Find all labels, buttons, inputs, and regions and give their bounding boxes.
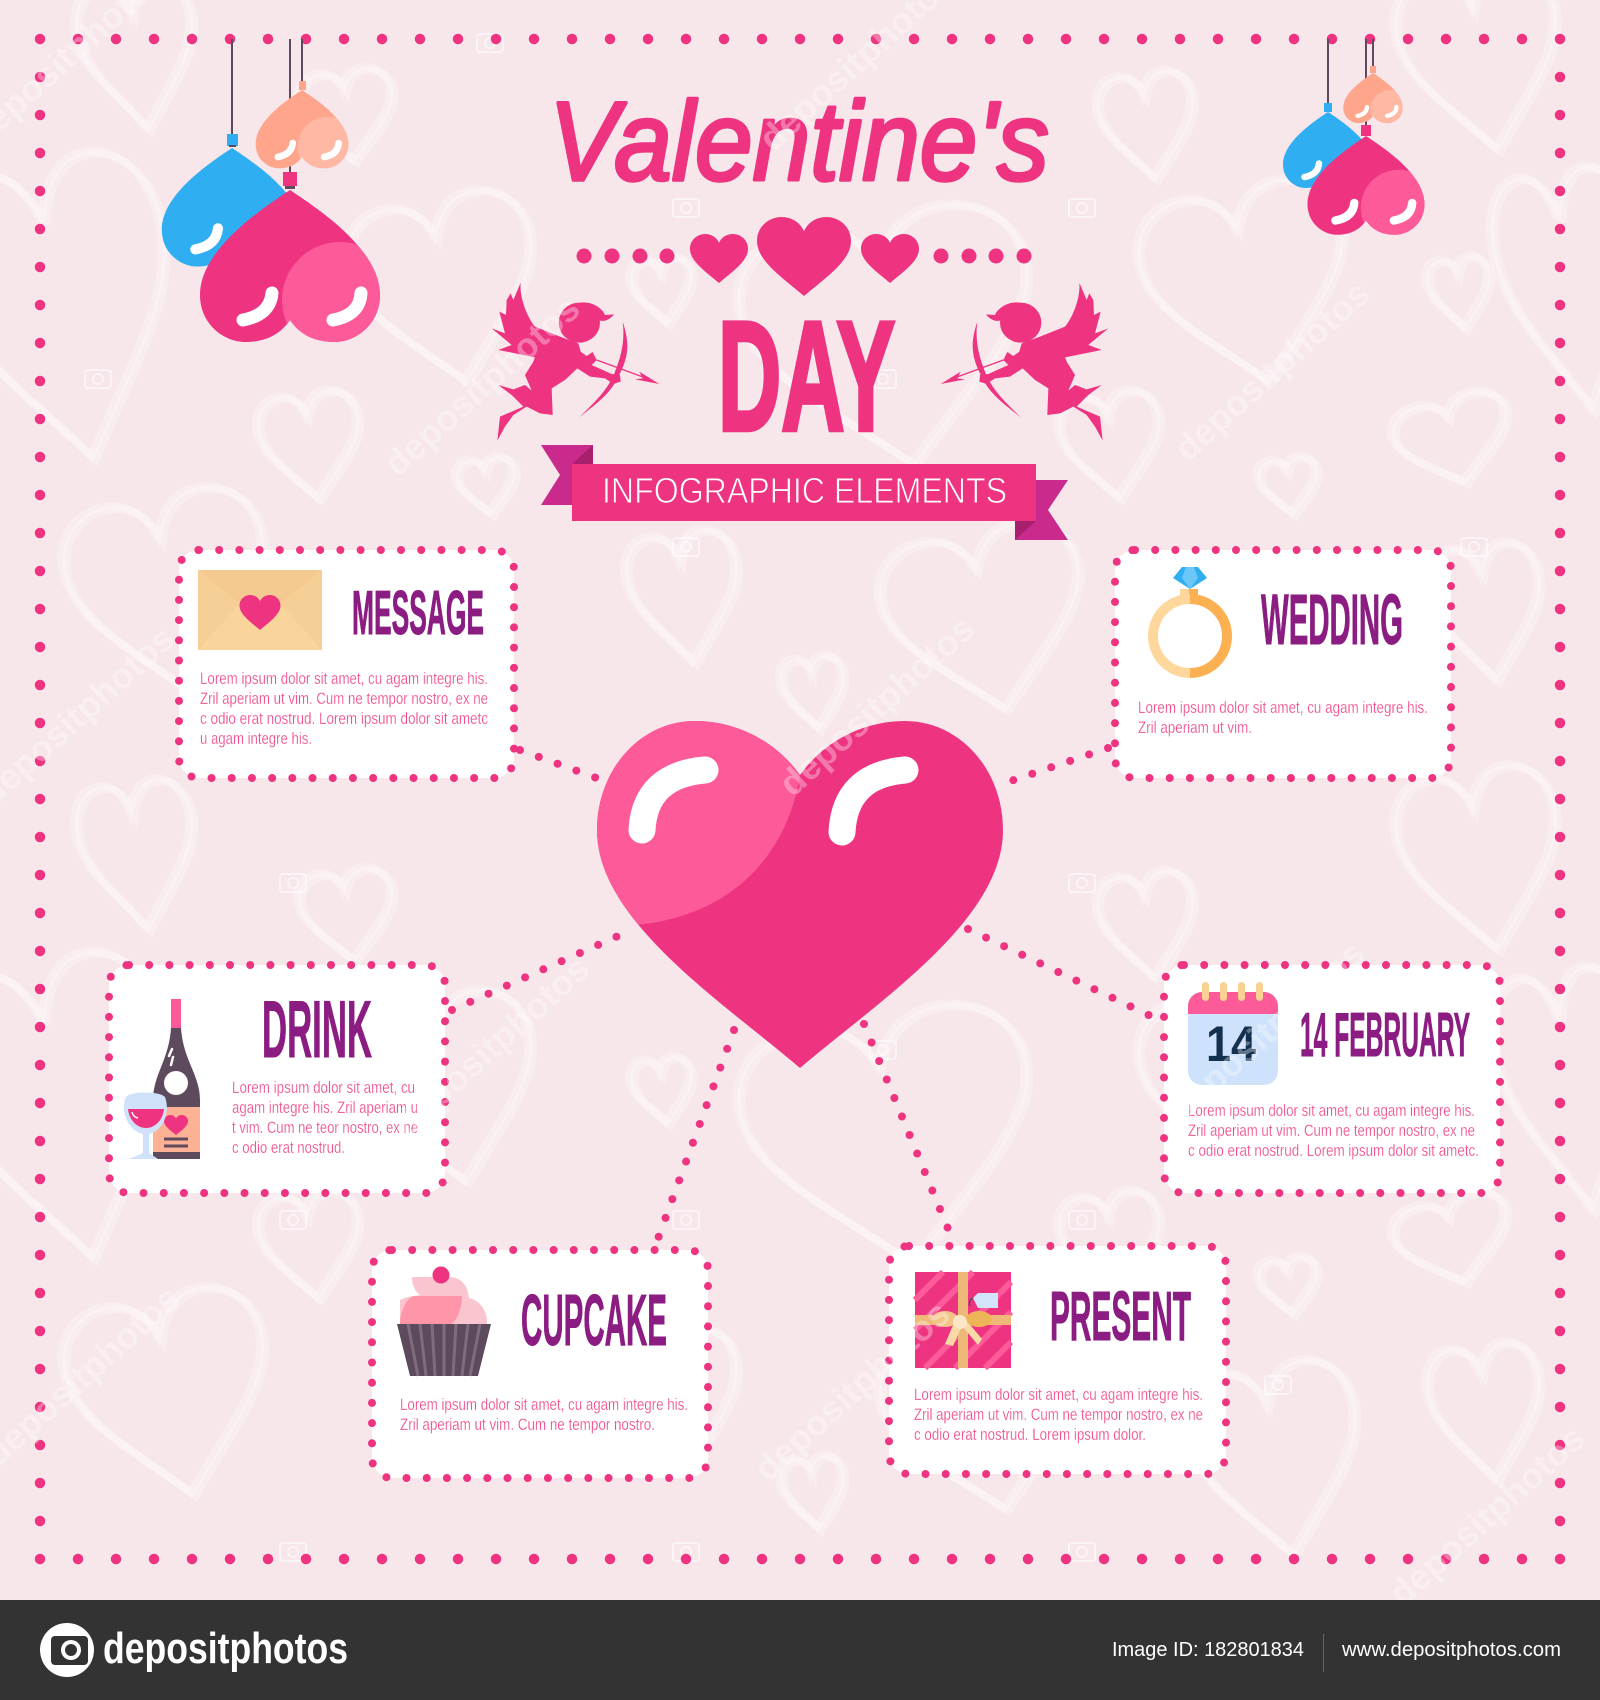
text: message body: u agam integre his.: [200, 730, 312, 748]
panel: cupcake: CUPCAKE: [521, 1281, 667, 1361]
text: drink body: [232, 1079, 418, 1157]
text: message body: Lorem ipsum dolor sit amet, cu agam integre his.: [200, 670, 488, 688]
footer bar: [0, 1600, 1600, 1700]
panel: drink: [109, 965, 445, 1193]
text: present body: Lorem ipsum dolor sit amet, cu agam integre his.: [914, 1386, 1203, 1404]
panel: wedding: [1115, 550, 1451, 778]
text: message body: c odio erat nostrud. Lorem ipsum dolor sit ametc: [200, 710, 488, 728]
text: wedding body: [1138, 699, 1428, 737]
watermarks: depositphotos: [771, 608, 982, 804]
text: message body: Zril aperiam ut vim. Cum ne tempor nostro, ex ne: [200, 690, 488, 708]
title: Valentine's: Valentine's: [549, 79, 1049, 204]
watermarks: depositphotos: [376, 288, 587, 484]
panel: drink: DRINK: [262, 985, 372, 1075]
watermarks: depositphotos: [386, 948, 597, 1144]
cupid left: [492, 283, 659, 441]
icon: wine bottle and glass: [124, 999, 200, 1159]
text: wedding body: Zril aperiam ut vim.: [1138, 719, 1252, 737]
ribbon banner: INFOGRAPHIC ELEMENTS: [602, 470, 1007, 511]
icon: gift box: [915, 1272, 1011, 1368]
icon: calendar: [1188, 982, 1278, 1085]
hanging balloons: left: [162, 39, 380, 342]
watermarks: depositphotos: [1161, 933, 1372, 1129]
panel: 14 february: [1164, 965, 1500, 1193]
panel: present: [889, 1246, 1226, 1474]
text: wedding body: Lorem ipsum dolor sit amet, cu agam integre his.: [1138, 699, 1428, 717]
icon: calendar: 14: [1206, 1016, 1256, 1072]
central heart: [590, 715, 1003, 1068]
title: DAY: DAY: [718, 290, 895, 464]
text: present body: [914, 1386, 1203, 1444]
text: drink body: t vim. Cum ne teor nostro, ex ne: [232, 1119, 418, 1137]
watermarks: depositphotos: [746, 1293, 957, 1489]
panel: cupcake: [372, 1250, 708, 1478]
website url: www.depositphotos.com: [1341, 1639, 1561, 1661]
text: cupcake body: Lorem ipsum dolor sit amet, cu agam integre his.: [400, 1396, 688, 1414]
cupid right: [941, 283, 1108, 441]
text: present body: c odio erat nostrud. Lorem ipsum dolor.: [914, 1426, 1146, 1444]
text: february body: c odio erat nostrud. Lorem ipsum dolor sit ametc.: [1188, 1142, 1479, 1160]
text: february body: [1188, 1102, 1479, 1160]
text: cupcake body: Zril aperiam ut vim. Cum ne tempor nostro.: [400, 1416, 655, 1434]
icon: cupcake: [397, 1266, 491, 1376]
text: message body: [200, 670, 488, 748]
ribbon banner: [541, 445, 1068, 540]
text: drink body: Lorem ipsum dolor sit amet, cu: [232, 1079, 415, 1097]
text: february body: Lorem ipsum dolor sit amet, cu agam integre his.: [1188, 1102, 1475, 1120]
panel: message: [179, 550, 514, 778]
panel: wedding: WEDDING: [1261, 581, 1403, 660]
icon: camera logo: [40, 1623, 94, 1677]
dotted connectors: [452, 748, 1157, 1244]
text: cupcake body: [400, 1396, 688, 1434]
hearts and dots divider: [576, 217, 1032, 296]
text: drink body: agam integre his. Zril aperiam u: [232, 1099, 418, 1117]
icon: envelope: [198, 570, 322, 650]
watermarks: depositphotos: [1381, 1418, 1592, 1614]
text: drink body: c odio erat nostrud.: [232, 1139, 345, 1157]
watermarks: depositphotos: [1166, 273, 1377, 469]
icon: ring: [1153, 567, 1227, 673]
text: february body: Zril aperiam ut vim. Cum ne tempor nostro, ex ne: [1188, 1122, 1475, 1140]
logo wordmark: depositphotos: [103, 1624, 348, 1673]
text: present body: Zril aperiam ut vim. Cum ne tempor nostro, ex ne: [914, 1406, 1203, 1424]
panel: message: MESSAGE: [352, 579, 484, 648]
panel: present: PRESENT: [1050, 1277, 1191, 1355]
image id: Image ID: 182801834: [1112, 1639, 1304, 1661]
hanging balloons: right: [1283, 39, 1424, 235]
